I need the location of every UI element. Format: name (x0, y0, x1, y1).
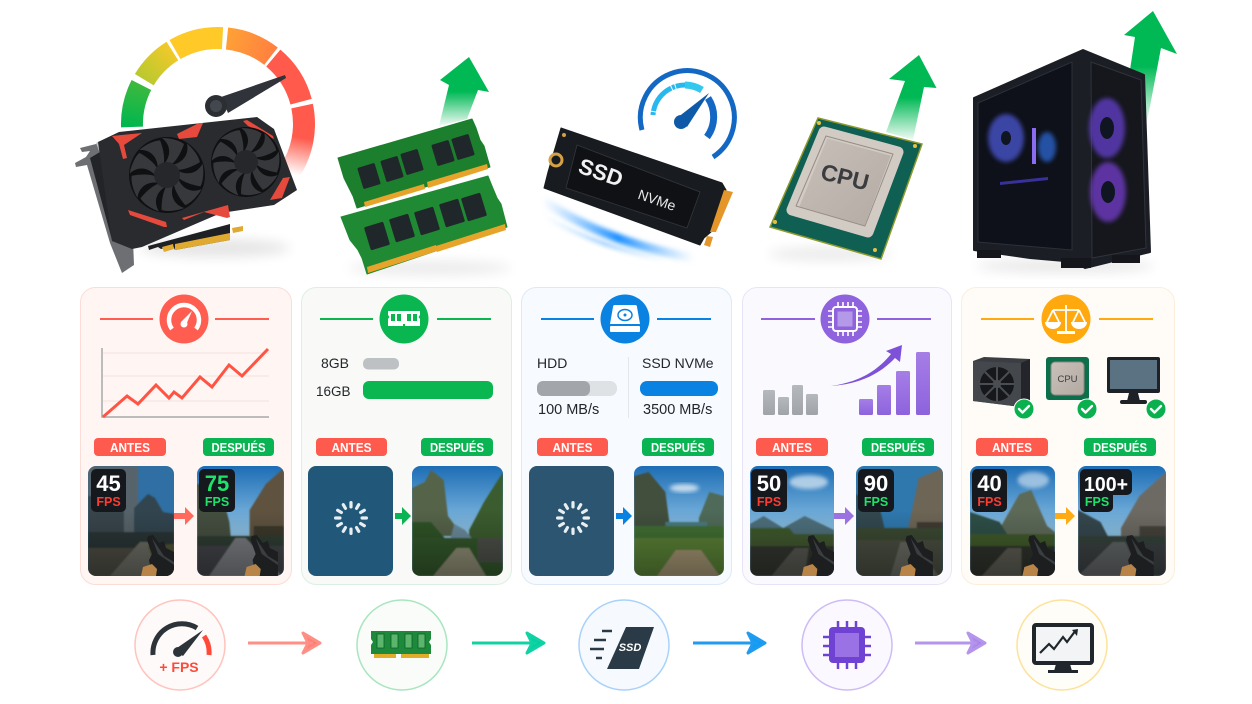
SSD board: NVMe (636, 186, 678, 214)
speedometer (640, 71, 734, 157)
header: scales icon (981, 294, 1153, 344)
icon: cpu (1046, 357, 1089, 400)
graphics card with performance gauge (75, 38, 304, 273)
badge: antes: ANTES (772, 440, 812, 455)
icon: SSD: SSD (619, 642, 641, 654)
badge: antes: ANTES (552, 440, 593, 455)
arrow: CPU upgrade (886, 55, 936, 140)
badge: antes (94, 438, 166, 456)
header: chip icon (761, 294, 931, 344)
screenshot after 75 FPS: FPS (205, 495, 229, 509)
arrow: before to after (616, 507, 632, 525)
icon: FPS gauge (135, 600, 225, 690)
panel: balance (962, 288, 1174, 584)
screenshot before 50 FPS: 50 (757, 471, 781, 496)
badge: antes (756, 438, 828, 456)
screenshot before 45 FPS (88, 466, 174, 576)
arrow: before to after (1055, 507, 1075, 525)
arrow: before to after (834, 507, 854, 525)
loading screen before (529, 466, 614, 576)
bar chart: performance (763, 345, 930, 415)
icon: chip (802, 600, 892, 690)
panel: RAM (302, 288, 512, 584)
icon: RAM (357, 600, 447, 690)
arrow (915, 633, 985, 653)
CPU with up arrow (768, 55, 936, 261)
arrow (472, 633, 544, 653)
CPU chip: CPU (818, 159, 872, 195)
badge: después: DESPUÉS (871, 440, 925, 455)
card body (75, 117, 297, 273)
SSD board (544, 128, 733, 247)
RAM module bottom (341, 176, 507, 274)
header: disk icon (541, 294, 711, 344)
RAM size bars: 16GB (316, 384, 351, 399)
badge: antes: ANTES (332, 440, 372, 455)
CPU chip (770, 118, 922, 259)
icon: monitor (1107, 357, 1160, 404)
loading screen before (308, 466, 393, 576)
speed comparison: 100 MB/s (538, 402, 599, 418)
screenshot after 100+ FPS (1078, 466, 1166, 576)
header: speedometer icon (100, 294, 269, 344)
arrow: before to after (174, 507, 194, 525)
badge: antes (316, 438, 387, 456)
RAM size bars: 8GB (321, 355, 349, 371)
badge: antes (537, 438, 608, 456)
RAM modules with up arrow (338, 57, 512, 275)
icon: cpu: CPU (1057, 374, 1078, 385)
speed comparison: HDD (537, 355, 567, 371)
panel: storage (522, 288, 732, 584)
screenshot after 100+ FPS: FPS (1085, 495, 1109, 509)
NVMe SSD with speedometer (542, 71, 734, 260)
screenshot before 50 FPS (750, 466, 834, 576)
screenshot after nature (412, 466, 503, 576)
badge: después: DESPUÉS (1093, 440, 1147, 455)
badge: después: DESPUÉS (651, 440, 705, 455)
icon: FPS gauge: + FPS (159, 659, 199, 675)
flow: bottom icons (135, 600, 1107, 690)
RAM module top (338, 119, 490, 208)
arrow (248, 633, 320, 653)
icon: monitor chart (1017, 600, 1107, 690)
gauge needle (205, 75, 286, 117)
SSD board: SSD (575, 153, 626, 192)
screenshot after 100+ FPS: 100+ (1084, 474, 1128, 496)
icon: power supply (973, 357, 1030, 407)
tower fans (988, 98, 1126, 222)
badge: antes: ANTES (110, 440, 150, 455)
screenshot before 40 FPS (970, 466, 1055, 576)
arrow: system upgrade (1124, 11, 1177, 122)
badge: antes: ANTES (992, 440, 1032, 455)
icon: check (1146, 399, 1166, 419)
icon: check (1077, 399, 1097, 419)
screenshot after 75 FPS: 75 (205, 471, 229, 496)
panel: CPU (742, 288, 952, 584)
screenshot after 90 FPS: 90 (864, 471, 888, 496)
screenshot before 45 FPS: FPS (96, 495, 121, 509)
screenshot before 45 FPS: 45 (96, 471, 121, 496)
gauge arc (132, 38, 304, 172)
badge: después: DESPUÉS (212, 440, 266, 455)
arrow: before to after (395, 507, 411, 525)
screenshot before 40 FPS: FPS (977, 495, 1002, 509)
screenshot before 40 FPS: 40 (977, 471, 1002, 496)
line chart (102, 348, 269, 417)
arrow (693, 633, 765, 653)
screenshot after 75 FPS (197, 466, 284, 576)
RAM size bars (316, 355, 493, 399)
component icons (973, 357, 1166, 419)
arrow: RAM upgrade (439, 57, 489, 126)
screenshot after 90 FPS: FPS (864, 495, 888, 509)
screenshot before 50 FPS: FPS (757, 495, 781, 509)
tower case (974, 50, 1150, 268)
icon: check (1014, 399, 1034, 419)
icon: SSD (579, 600, 669, 690)
speed comparison: 3500 MB/s (643, 402, 712, 418)
badge: antes (976, 438, 1048, 456)
screenshot after nature (634, 466, 724, 576)
speed comparison (537, 355, 718, 418)
speed comparison: SSD NVMe (642, 355, 714, 371)
PC tower with up arrow (974, 11, 1177, 272)
panel: GPU FPS (80, 288, 292, 584)
speed swoosh (542, 200, 694, 260)
badge: después: DESPUÉS (430, 440, 484, 455)
screenshot after 90 FPS (856, 466, 943, 576)
header: RAM icon (320, 294, 491, 344)
